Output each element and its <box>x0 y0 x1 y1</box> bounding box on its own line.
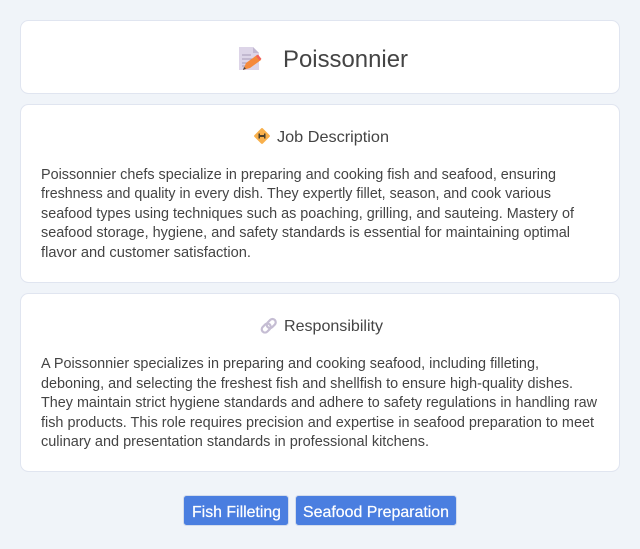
icon: memo with pencil <box>239 47 262 70</box>
job description heading: Job Description <box>277 129 389 146</box>
tag: seafood preparation: Seafood Preparation <box>303 504 449 521</box>
panel: title <box>20 20 620 94</box>
responsibility text <box>41 356 598 450</box>
icon: orange diamond sign <box>254 128 270 144</box>
job description text: freshness and quality in every dish. They expertly fillet, season, and cook various <box>41 186 551 202</box>
tag: fish filleting <box>184 496 288 526</box>
tag: fish filleting: Fish Filleting <box>192 504 281 521</box>
tag: seafood preparation <box>296 496 456 526</box>
responsibility text: A Poissonnier specializes in preparing and cooking seafood, including filleting, <box>41 356 539 372</box>
responsibility text: deboning, and selecting the freshest fish and shellfish to ensure high-quality dishes. <box>41 376 573 392</box>
panel: job description <box>20 104 620 282</box>
job description text: flavor and customer satisfaction. <box>41 245 251 261</box>
icon: chain link <box>260 318 277 334</box>
title text: Poissonnier <box>283 46 408 73</box>
job description text: Poissonnier chefs specialize in preparing and cooking fish and seafood, ensuring <box>41 167 556 183</box>
responsibility text: They maintain strict hygiene standards and adhere to safety regulations in handling raw <box>41 395 598 411</box>
responsibility heading: Responsibility <box>284 318 383 335</box>
panel: responsibility <box>20 294 620 472</box>
responsibility text: culinary and presentation standards in professional kitchens. <box>41 434 429 450</box>
job description text: seafood types using techniques such as poaching, grilling, and sauteing. Mastery of <box>41 206 575 222</box>
job description text <box>41 167 575 261</box>
job description text: seafood storage, hygiene, and safety standards is essential for maintaining optimal <box>41 225 570 241</box>
responsibility text: fish products. This role requires precision and expertise in seafood preparation to meet <box>41 415 594 431</box>
